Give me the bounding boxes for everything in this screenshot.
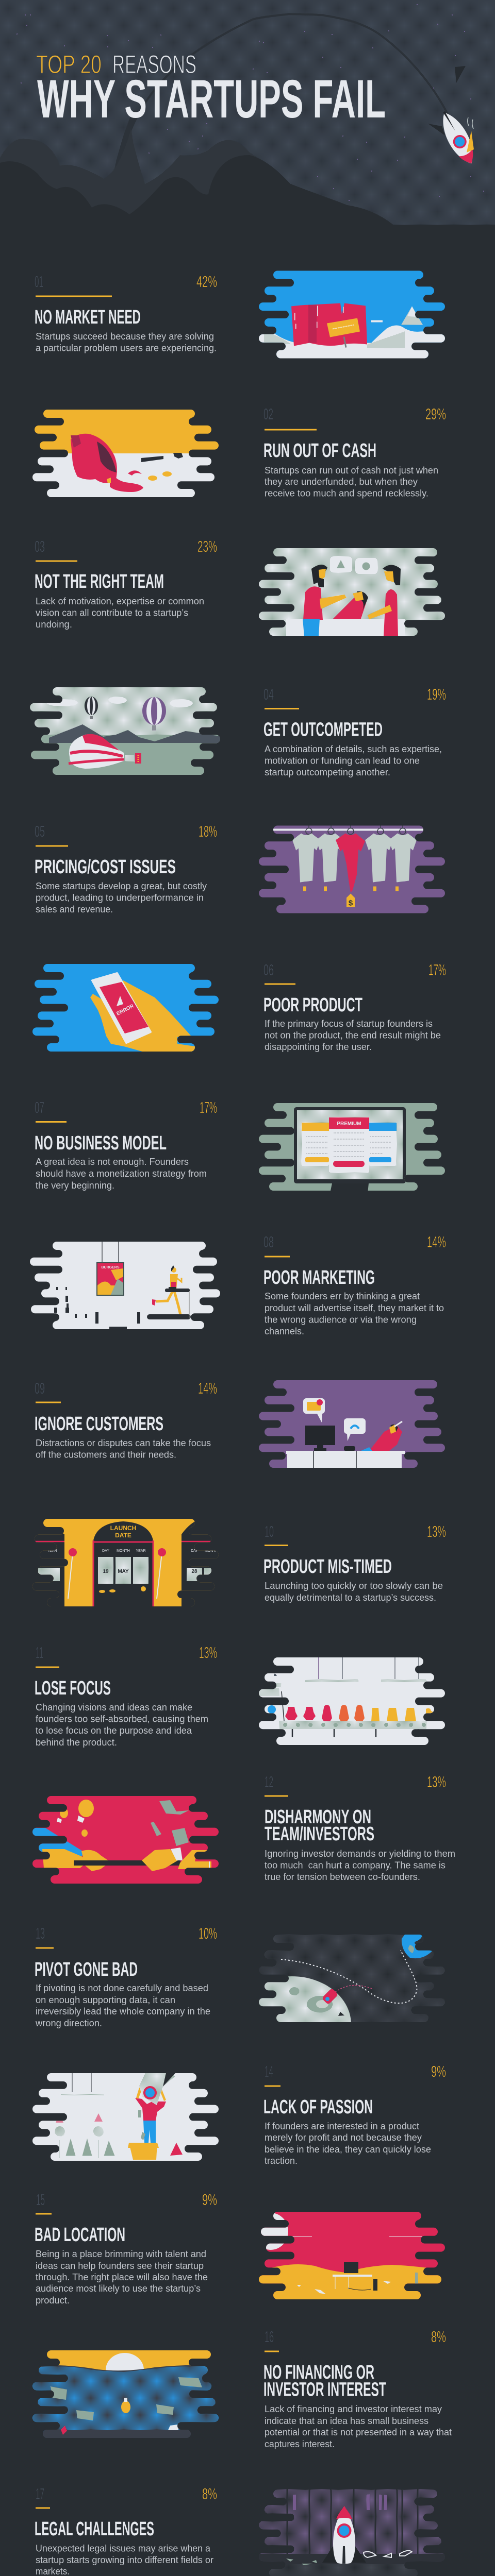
body text: on enough supporting data, it can <box>36 1995 175 2005</box>
body text: indicate that an idea has small business <box>265 2416 428 2426</box>
percentage: 13% <box>427 1773 446 1791</box>
bar <box>36 1121 67 1123</box>
bar <box>36 561 77 562</box>
body text <box>265 1291 444 1336</box>
body text: Launching too quickly or too slowly can be <box>265 1581 443 1591</box>
body text <box>265 2404 452 2449</box>
bar <box>265 1545 288 1546</box>
panel: 06 poor product <box>28 961 446 1054</box>
illustration: launch date calendar: 19 <box>103 1569 109 1574</box>
bar <box>265 2350 279 2352</box>
panel: 01 no market need: 01 <box>35 273 43 291</box>
illustration: launch date calendar <box>28 1519 222 1609</box>
title: REASONS <box>112 50 196 79</box>
body text: Ignoring investor demands or yielding to them <box>265 1849 455 1859</box>
heading: LOSE FOCUS <box>35 1677 111 1699</box>
percentage: 14% <box>198 1379 217 1397</box>
bar <box>265 1256 290 1257</box>
body text: Changing visions and ideas can make <box>36 1702 192 1713</box>
percentage: 17% <box>428 961 446 979</box>
body text <box>36 1438 211 1460</box>
panel: 04 get outcompeted <box>26 685 446 778</box>
body text: Lack of financing and investor interest may <box>265 2404 442 2414</box>
number: 03 <box>35 537 45 555</box>
hills silhouette: front layer <box>0 155 393 225</box>
body text: through. The right place will also have the <box>36 2272 208 2282</box>
heading: NO FINANCING OR <box>263 2362 374 2383</box>
panel: 01 no market need <box>35 271 449 361</box>
illustration: shirts on a rail with price tag: $ <box>349 899 353 908</box>
illustration: conveyor belt of toys <box>255 1657 449 1748</box>
heading: LEGAL CHALLENGES <box>35 2518 154 2540</box>
body text: startup outcompeting another. <box>265 767 390 777</box>
illustration: launch date calendar: 28 <box>191 1569 197 1574</box>
illustration: pricing plans on a tablet: PREMIUM <box>337 1121 361 1127</box>
panel: 02 run out of cash <box>28 405 446 500</box>
body text <box>36 881 207 914</box>
falling rocket <box>428 66 481 168</box>
rocket smoke trail <box>116 14 448 175</box>
body text: Distractions or disputes can take the focus <box>36 1438 211 1448</box>
panel: 14 lack of passion: 14 <box>265 2062 273 2080</box>
number: 10 <box>265 1522 274 1540</box>
illustration: phone with error: ERROR <box>116 1003 135 1017</box>
heading: IGNORE CUSTOMERS <box>35 1413 163 1435</box>
illustration: rocket off course in space <box>259 1935 445 2022</box>
heading: TEAM/INVESTORS <box>265 1823 374 1845</box>
percentage: 8% <box>431 2328 446 2346</box>
heading: DISHARMONY ON <box>265 1806 371 1828</box>
body text <box>36 596 204 630</box>
body text: If founders are interested in a product <box>265 2121 419 2131</box>
body text: irreversibly lead the whole company in the <box>36 2006 210 2016</box>
body text: the very beginning. <box>36 1180 114 1191</box>
number: 02 <box>263 405 273 423</box>
heading: NOT THE RIGHT TEAM <box>35 571 164 592</box>
illustration: launch date calendar: MONTH <box>205 1549 218 1553</box>
panel: 15 bad location <box>35 2191 449 2306</box>
illustration: launch date calendar: YEAR <box>136 1549 146 1553</box>
body text: they are underfunded, but when they <box>265 477 418 487</box>
bar <box>265 2086 280 2087</box>
body text: Lack of motivation, expertise or common <box>36 596 204 606</box>
number: 07 <box>35 1098 44 1116</box>
bar <box>36 1947 54 1948</box>
body text <box>265 1849 455 1882</box>
illustration: tug of war <box>28 1796 222 1886</box>
bar <box>265 429 317 431</box>
panel: 11 lose focus <box>35 1643 449 1748</box>
header scene: night sky with stars <box>0 0 495 225</box>
body text <box>36 2543 213 2576</box>
panel: 07 no business model <box>35 1098 449 1193</box>
body text: behind the product. <box>36 1737 117 1748</box>
body text: Startups succeed because they are solving <box>36 331 214 342</box>
illustration: flag on iceberg <box>255 271 449 361</box>
bar <box>265 983 295 985</box>
body text <box>36 2249 208 2306</box>
title <box>36 50 386 129</box>
heading: INVESTOR INTEREST <box>263 2379 386 2401</box>
illustration: pricing plans on a tablet <box>255 1103 449 1193</box>
panel: 15 bad location: 15 <box>36 2191 45 2209</box>
panel: 10 product mis-timed <box>28 1519 446 1609</box>
illustration: runner passing a poster: BURGERS <box>101 1266 120 1269</box>
number: 16 <box>265 2328 274 2346</box>
illustration: desk in the desert <box>253 2212 449 2302</box>
illustration: launch date calendar: LAUNCH <box>110 1524 136 1532</box>
body text: potential or that is not presented in a way that <box>265 2427 452 2437</box>
heading: BAD LOCATION <box>35 2224 125 2246</box>
bar <box>36 296 112 297</box>
number: 09 <box>35 1379 45 1397</box>
heading <box>265 1806 374 1845</box>
body text: Some founders err by thinking a great <box>265 1291 420 1301</box>
body text <box>265 465 438 499</box>
title: TOP 20 <box>36 50 102 79</box>
percentage: 42% <box>196 273 217 291</box>
body text <box>36 1702 208 1748</box>
body text: channels. <box>265 1326 304 1336</box>
body text: not on the product, the end result might be <box>265 1030 441 1041</box>
body text: startup starts growing into different fields or <box>36 2555 213 2565</box>
bar <box>36 1401 61 1403</box>
number: 05 <box>35 822 45 840</box>
panel: 17 legal challenges <box>35 2485 449 2576</box>
heading: NO MARKET NEED <box>35 307 141 328</box>
body text: vision can all contribute to a startup’s <box>36 608 188 618</box>
percentage: 13% <box>199 1643 217 1662</box>
body text: Unexpected legal issues may arise when a <box>36 2543 211 2553</box>
illustration: idea sinking under water <box>28 2350 222 2441</box>
heading <box>263 2362 386 2401</box>
body text: a particular problem users are experiencing. <box>36 343 217 353</box>
illustration: launch date calendar: MAY <box>118 1569 129 1574</box>
panel: 16 no financing or investor interest <box>28 2328 452 2449</box>
body text: A great idea is not enough. Founders <box>36 1157 189 1167</box>
heading: POOR PRODUCT <box>263 994 362 1016</box>
body text: disappointing for the user. <box>265 1042 372 1052</box>
body text: undoing. <box>36 619 72 630</box>
panel: 03 not the right team <box>35 537 449 638</box>
heading: RUN OUT OF CASH <box>263 440 376 462</box>
body text: captures interest. <box>265 2439 335 2449</box>
body text <box>265 744 442 777</box>
body text: If the primary focus of startup founders is <box>265 1019 433 1029</box>
heading: PIVOT GONE BAD <box>35 1959 138 1980</box>
percentage: 23% <box>197 537 217 555</box>
heading: PRODUCT MIS-TIMED <box>263 1556 392 1578</box>
body text: receive too much and spend recklessly. <box>265 488 428 499</box>
body text: the wrong audience or via the wrong <box>265 1315 417 1325</box>
panel: 17 legal challenges: 17 <box>36 2485 44 2503</box>
illustration: launch date calendar: DAY <box>102 1549 109 1553</box>
body text: true for tension between co-founders. <box>265 1872 420 1882</box>
illustration: rocket locked up in storage <box>255 2489 449 2576</box>
panel: 13 pivot gone bad <box>35 1928 445 2028</box>
heading: GET OUTCOMPETED <box>263 719 383 741</box>
percentage: 10% <box>199 1924 217 1942</box>
illustration: person with rocket head <box>28 2073 222 2163</box>
panel: 11 lose focus: 11 <box>36 1643 43 1662</box>
body text <box>35 1983 210 2028</box>
body text: product. <box>36 2295 70 2306</box>
percentage: 29% <box>425 405 446 423</box>
heading: PRICING/COST ISSUES <box>35 856 176 878</box>
panel: 05 pricing/cost issues <box>35 822 449 916</box>
body text: motivation or funding can lead to one <box>265 755 420 766</box>
illustration: phone with error <box>28 964 222 1054</box>
body text: audience most likely to use the startup’s <box>36 2283 201 2294</box>
body text: Being in a place brimming with talent and <box>36 2249 206 2259</box>
body text: wrong direction. <box>35 2018 102 2028</box>
body text: sales and revenue. <box>36 904 113 914</box>
bar <box>36 2507 50 2509</box>
bar <box>36 2213 52 2214</box>
percentage: 14% <box>427 1233 446 1251</box>
body text <box>265 1581 443 1603</box>
body text: Startups can run out of cash not just when <box>265 465 438 476</box>
body text: A combination of details, such as expertise, <box>265 744 442 754</box>
body text: Some startups develop a great, but costly <box>36 881 207 891</box>
panel: 08 poor marketing <box>26 1233 446 1336</box>
illustration: broken piggy bank <box>28 410 222 500</box>
percentage: 19% <box>427 685 446 703</box>
body text <box>265 1019 441 1052</box>
body text: believe in the idea, they can quickly lose <box>265 2144 431 2155</box>
body text: should have a monetization strategy from <box>36 1168 207 1179</box>
body text: product will advertise itself, they market it to <box>265 1303 444 1313</box>
hills silhouette: back layer <box>0 129 392 225</box>
body text: traction. <box>265 2156 298 2166</box>
number: 08 <box>263 1233 274 1251</box>
panel: 12 disharmony on team/investors: 12 <box>265 1773 273 1791</box>
body text <box>36 331 217 353</box>
panel: 09 ignore customers <box>35 1379 449 1470</box>
body text: product, leading to underperformance in <box>36 892 204 903</box>
illustration: runner passing a poster <box>26 1242 224 1332</box>
panel: 12 disharmony on team/investors <box>28 1773 455 1886</box>
illustration: launch date calendar: YEAR <box>47 1549 57 1553</box>
heading: NO BUSINESS MODEL <box>35 1132 167 1154</box>
body text: equally detrimental to a startup’s success. <box>265 1592 436 1603</box>
percentage: 13% <box>427 1522 446 1540</box>
body text: off the customers and their needs. <box>36 1450 176 1460</box>
percentage: 8% <box>202 2485 217 2503</box>
number: 04 <box>263 685 274 703</box>
percentage: 18% <box>199 822 217 840</box>
bar <box>36 1666 59 1668</box>
number: 06 <box>263 961 274 979</box>
bar <box>265 1795 288 1797</box>
body text: If pivoting is not done carefully and based <box>36 1983 208 1993</box>
percentage: 9% <box>431 2062 446 2080</box>
illustration: launch date calendar: DATE <box>115 1532 131 1539</box>
illustration: team disagreement <box>255 548 449 638</box>
body text: merely for profit and not because they <box>265 2132 422 2143</box>
body text: to lose focus on the purpose and idea <box>36 1725 192 1736</box>
body text <box>36 1157 207 1191</box>
percentage: 17% <box>200 1098 217 1116</box>
bar <box>265 708 299 709</box>
illustration: launch date calendar: MONTH <box>117 1549 130 1553</box>
body text <box>265 2121 431 2166</box>
illustration: launch date calendar: DAY <box>191 1549 198 1553</box>
percentage: 9% <box>202 2191 217 2209</box>
body text: founders too self-absorbed, causing them <box>36 1714 208 1724</box>
illustration: hot air balloons <box>26 687 224 778</box>
heading: POOR MARKETING <box>263 1267 375 1289</box>
illustration: employee ignoring calls <box>255 1380 449 1470</box>
illustration: shirts on a rail with price tag <box>255 825 449 916</box>
body text: ideas can help founders see their startup <box>36 2261 204 2271</box>
number: 13 <box>36 1924 45 1942</box>
panel: 14 lack of passion <box>28 2062 446 2166</box>
bar <box>36 845 68 847</box>
heading: LACK OF PASSION <box>263 2096 373 2118</box>
body text: too much can hurt a company. The same is <box>265 1860 446 1870</box>
